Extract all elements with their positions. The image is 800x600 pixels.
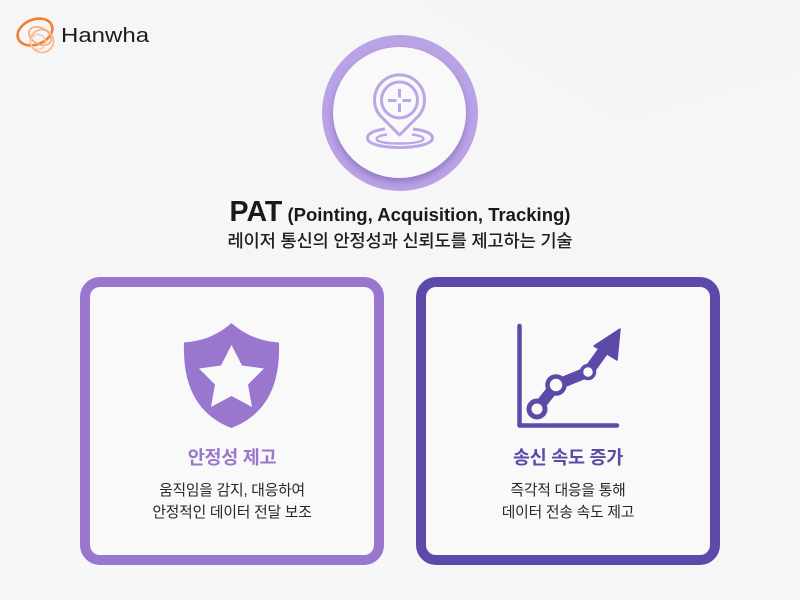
description: 즉각적 대응을 통해	[510, 483, 626, 499]
description	[502, 482, 634, 521]
logo: Hanwha	[16, 17, 150, 54]
description	[152, 482, 312, 521]
description: 안정적인 데이터 전달 보조	[152, 505, 312, 521]
panel: transmission speed	[416, 277, 720, 565]
logo icon	[16, 17, 54, 54]
description: 데이터 전송 속도 제고	[502, 505, 634, 521]
title: PAT (Pointing, Acquisition, Tracking)	[230, 196, 570, 228]
pin icon	[366, 73, 434, 149]
heading: 안정성 제고	[188, 447, 276, 468]
logo wordmark: Hanwha	[61, 25, 149, 47]
icon badge: location pin with crosshair	[322, 35, 478, 191]
panel: stability	[80, 277, 384, 565]
description: 움직임을 감지, 대응하여	[159, 483, 305, 499]
badge inner circle	[333, 47, 466, 178]
heading: 송신 속도 증가	[513, 447, 623, 468]
icon: shield with star	[184, 323, 280, 428]
subtitle: 레이저 통신의 안정성과 신뢰도를 제고하는 기술	[227, 231, 573, 251]
icon: rising line chart	[517, 324, 621, 428]
